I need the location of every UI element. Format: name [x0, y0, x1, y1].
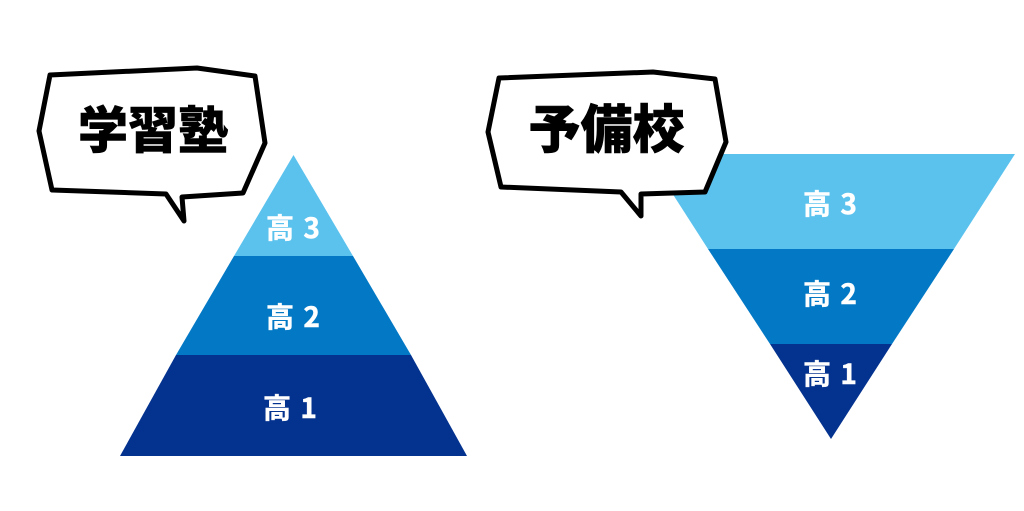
tier: 高2: 高 2: [266, 296, 320, 336]
tier: 高3: [647, 154, 1015, 249]
tier: 高2: [176, 256, 411, 355]
tier: 高2: [708, 249, 954, 344]
tier: 高3: 高 3: [266, 207, 320, 247]
pyramid: 学習塾: [120, 155, 467, 456]
tier: 高1: [770, 344, 892, 439]
tier: 高2: 高 2: [803, 273, 857, 313]
tier: 高3: 高 3: [803, 183, 857, 223]
tier: 高3: [234, 155, 353, 256]
speech bubble: 学習塾: 学習塾: [78, 91, 228, 163]
speech bubble: 予備校: [488, 72, 726, 216]
speech bubble: 予備校: 予備校: [528, 88, 685, 163]
speech bubble: 学習塾: [39, 68, 265, 221]
tier: 高1: [120, 355, 467, 456]
inverted pyramid: 予備校: [647, 154, 1015, 439]
tier: 高1: 高 1: [263, 387, 317, 427]
tier: 高1: 高 1: [803, 353, 857, 393]
